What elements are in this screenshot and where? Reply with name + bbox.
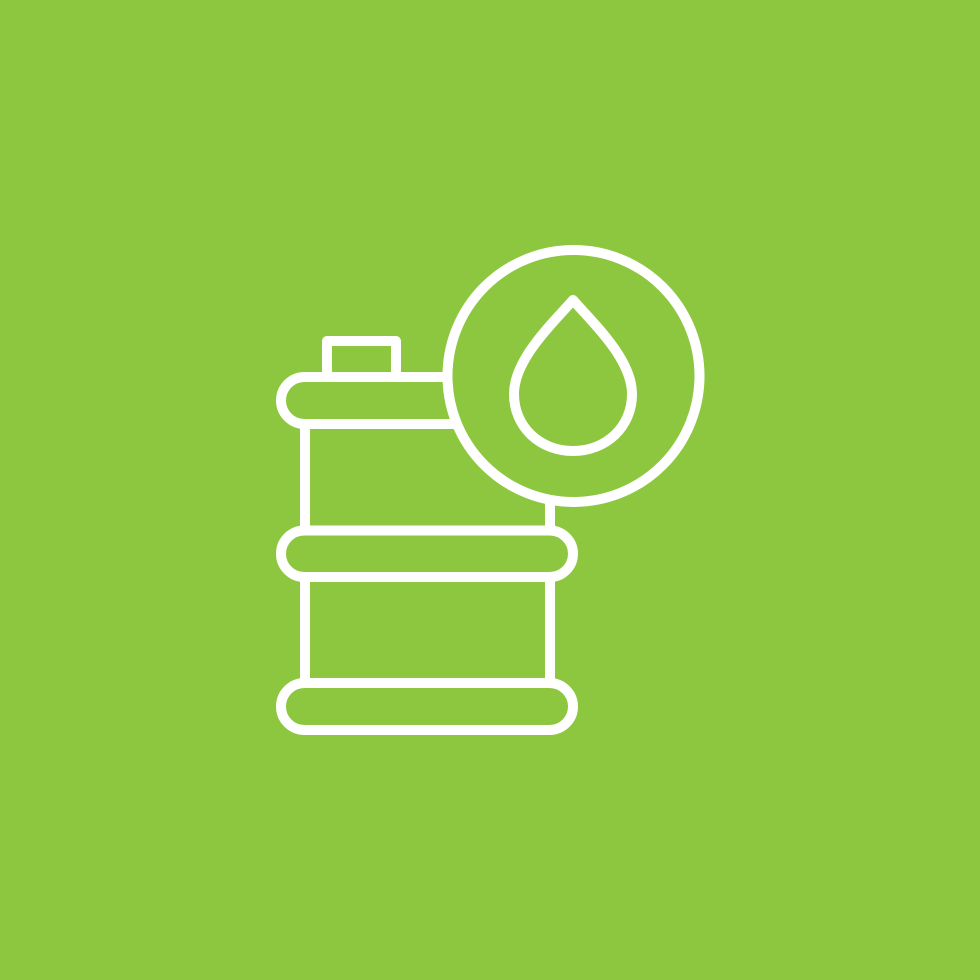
barrel cap xyxy=(327,341,396,377)
oil drop xyxy=(514,300,632,451)
bottom rim xyxy=(281,683,573,730)
barrel lower walls xyxy=(305,577,550,683)
barrel upper right wall xyxy=(545,503,555,531)
middle rim xyxy=(281,530,573,577)
top rim xyxy=(281,377,456,424)
barrel upper left wall xyxy=(300,424,310,531)
circle badge xyxy=(448,250,700,502)
